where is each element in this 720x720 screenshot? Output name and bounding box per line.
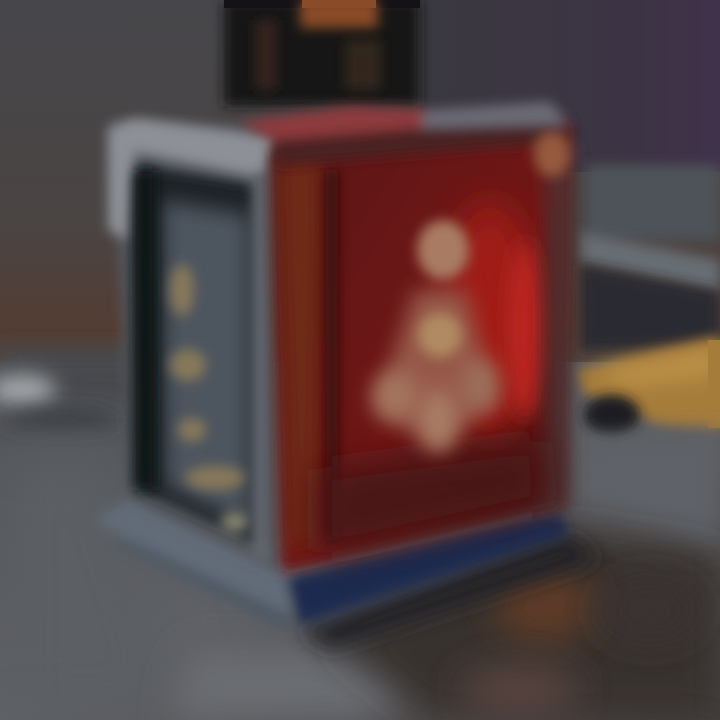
right background: shelf and yellow object	[570, 165, 720, 550]
box base	[95, 498, 568, 632]
emblem on the red panel	[373, 220, 498, 450]
table surface	[0, 350, 720, 720]
box shadow on the table	[300, 535, 600, 650]
table reflection at lower right	[330, 530, 720, 720]
box right face: red panel	[272, 122, 570, 572]
background wall	[0, 0, 720, 370]
dark object behind the box	[224, 0, 420, 106]
box top edge	[240, 102, 570, 177]
shelf items inside window	[170, 264, 249, 532]
box	[108, 102, 570, 572]
box left face: silver frame with dark window	[108, 118, 280, 572]
